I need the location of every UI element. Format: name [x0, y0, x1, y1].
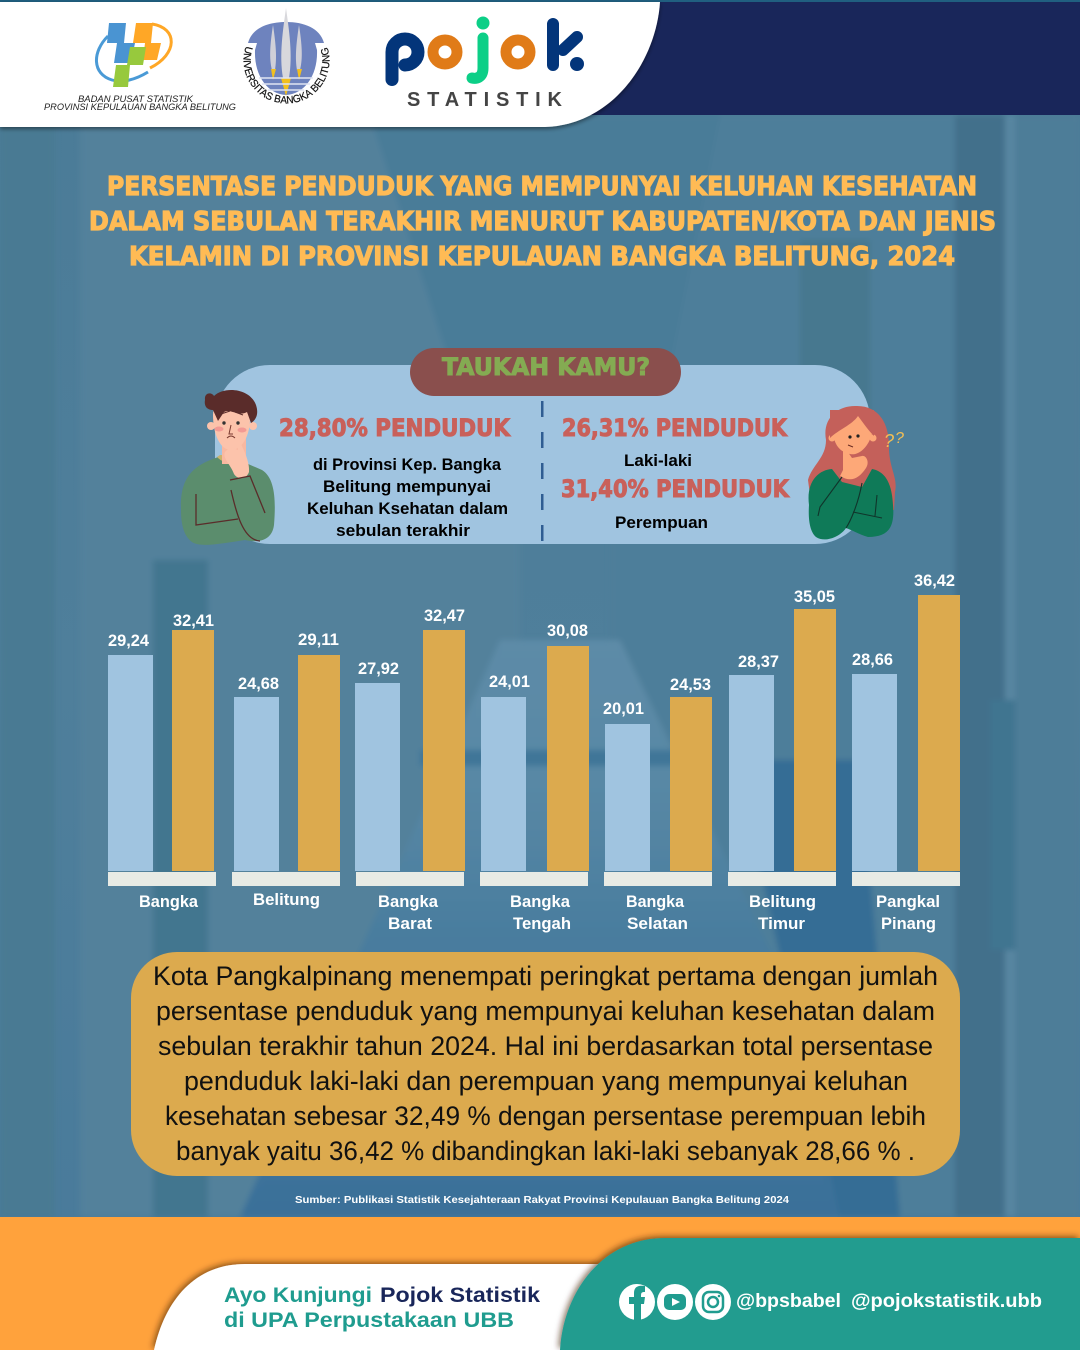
icon: instagram [695, 1284, 731, 1320]
stat: total population: sebulan terakhir [336, 522, 471, 540]
group: Bangka Selatan: 20,01 [603, 700, 644, 718]
footer teal panel: @pojokstatistik.ubb [851, 1291, 1042, 1312]
callout: explanation: sebulan terakhir tahun 2024. Hal ini berdasarkan total persentase [158, 1031, 933, 1061]
group: Bangka Barat [355, 607, 465, 933]
group: Belitung: 24,68 [238, 675, 279, 693]
group: Pangkal Pinang: Pinang [881, 915, 936, 933]
logo: Universitas Bangka Belitung: UNIVERSITAS BANGKA BELITUNG [243, 47, 330, 104]
group: Belitung Timur: 28,37 [738, 653, 779, 671]
illustration: thinking woman: ? [895, 430, 904, 447]
group: Bangka Tengah: 24,01 [489, 673, 530, 691]
title [89, 172, 996, 272]
footer white panel: di UPA Perpustakaan UBB [224, 1308, 514, 1332]
group: Bangka Selatan: 24,53 [670, 676, 711, 694]
footer teal panel: @bpsbabel [736, 1291, 841, 1312]
group: Bangka: 32,41 [173, 612, 214, 630]
header navy band [0, 0, 1080, 115]
stat: female: Perempuan [615, 514, 708, 532]
title: DALAM SEBULAN TERAKHIR MENURUT KABUPATEN/KOTA DAN JENIS [89, 207, 996, 237]
callout: explanation: penduduk laki-laki dan perempuan yang mempunyai keluhan [184, 1066, 908, 1096]
footer [0, 1217, 1080, 1350]
callout: explanation [131, 952, 960, 1176]
group: Bangka: 29,24 [108, 632, 150, 650]
icon: facebook [619, 1284, 655, 1320]
group: Bangka Tengah: 30,08 [547, 622, 588, 640]
stat: total population: 28,80% PENDUDUK [279, 414, 511, 442]
group: Pangkal Pinang: Pangkal [876, 893, 940, 911]
group: Pangkal Pinang [852, 572, 960, 933]
group: Bangka Barat: 32,47 [424, 607, 465, 625]
stat: total population: di Provinsi Kep. Bangka [313, 456, 502, 474]
stat: female [561, 475, 790, 532]
stat: male: 26,31% PENDUDUK [562, 414, 788, 442]
logo: BPS [44, 23, 237, 113]
group: Belitung: Belitung [253, 891, 320, 909]
icon: youtube [657, 1284, 693, 1320]
illustration: thinking woman [808, 406, 904, 539]
stat: male [562, 414, 788, 470]
group: Belitung Timur: Belitung [749, 893, 816, 911]
bar chart [108, 572, 960, 933]
title: KELAMIN DI PROVINSI KEPULAUAN BANGKA BELITUNG, 2024 [129, 242, 955, 272]
illustration: thinking woman: ? [884, 431, 894, 451]
group: Bangka Barat: Barat [388, 915, 433, 933]
stat: male: Laki-laki [624, 452, 692, 470]
group: Bangka Selatan: Selatan [627, 915, 688, 933]
title: PERSENTASE PENDUDUK YANG MEMPUNYAI KELUHAN KESEHATAN [107, 172, 977, 202]
group: Bangka Selatan [603, 676, 712, 933]
group: Bangka Barat: Bangka [378, 893, 439, 911]
header white panel with logos [0, 2, 662, 132]
group: Bangka Selatan: Bangka [626, 893, 685, 911]
footer white panel [154, 1264, 600, 1350]
group: Belitung Timur [728, 588, 836, 933]
group: Bangka [108, 612, 216, 911]
group: Bangka: Bangka [139, 893, 199, 911]
stat: female: 31,40% PENDUDUK [561, 475, 790, 503]
logo: BPS: PROVINSI KEPULAUAN BANGKA BELITUNG [44, 102, 237, 113]
stat: total population: Keluhan Ksehatan dalam [307, 500, 508, 518]
source note: Sumber: Publikasi Statistik Kesejahteraan Rakyat Provinsi Kepulauan Bangka Belitung 2024 [295, 1194, 789, 1206]
logo: Universitas Bangka Belitung [243, 9, 330, 104]
group: Belitung Timur: Timur [758, 915, 806, 933]
group: Belitung [232, 631, 340, 909]
group: Bangka Barat: 27,92 [358, 660, 399, 678]
footer white panel: Ayo Kunjungi [224, 1283, 372, 1307]
callout: explanation: persentase penduduk yang mempunyai keluhan kesehatan dalam [156, 996, 935, 1026]
group: Belitung: 29,11 [298, 631, 339, 649]
group: Bangka Tengah: Bangka [510, 893, 571, 911]
stat: total population: Belitung mempunyai [323, 478, 491, 496]
callout: explanation: kesehatan sebesar 32,49 % dengan persentase perempuan lebih [165, 1101, 926, 1131]
group: Belitung Timur: 35,05 [794, 588, 835, 606]
footer teal panel [560, 1238, 1080, 1350]
group: Bangka Tengah: Tengah [513, 915, 571, 933]
logo: Pojok Statistik [392, 16, 584, 111]
badge: taukah kamu [410, 348, 681, 396]
panel: taukah kamu [181, 348, 904, 545]
group: Bangka Tengah [480, 622, 589, 933]
group: Pangkal Pinang: 36,42 [914, 572, 955, 590]
stat: total population [279, 414, 511, 540]
logo: Pojok Statistik: STATISTIK [407, 89, 563, 111]
badge: taukah kamu: TAUKAH KAMU? [442, 353, 650, 381]
callout: explanation: Kota Pangkalpinang menempati peringkat pertama dengan jumlah [153, 961, 938, 991]
group: Pangkal Pinang: 28,66 [852, 651, 893, 669]
divider dashes [541, 401, 544, 541]
callout: explanation: banyak yaitu 36,42 % dibandingkan laki-laki sebanyak 28,66 % . [176, 1136, 915, 1166]
logo: BPS: BADAN PUSAT STATISTIK [78, 94, 194, 105]
footer white panel: Pojok Statistik [380, 1283, 540, 1307]
illustration: thinking man [181, 390, 275, 545]
